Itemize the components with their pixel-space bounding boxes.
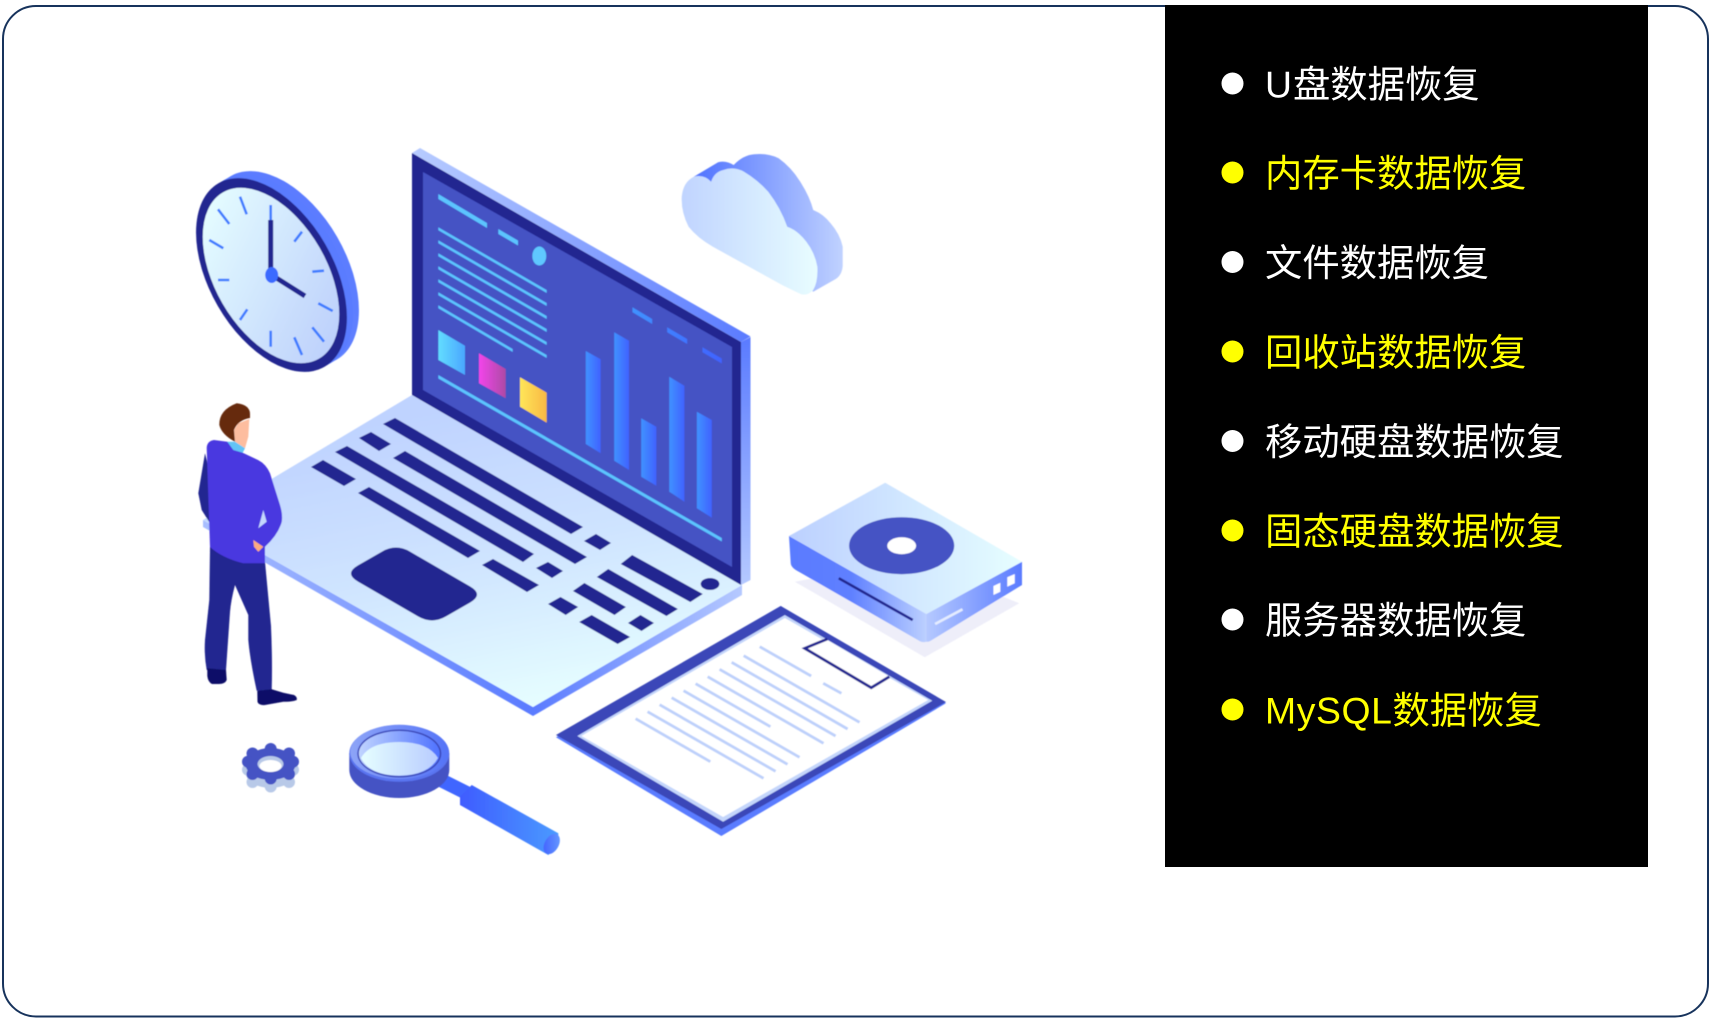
list item: 服务器数据恢复: 服务器数据恢复 (1265, 600, 1526, 642)
icon: clipboard document (556, 606, 946, 836)
screen content (438, 194, 722, 542)
keyboard (311, 418, 719, 644)
list item: 内存卡数据恢复: 内存卡数据恢复 (1265, 152, 1526, 194)
icon: cloud (682, 154, 843, 295)
list item: 移动硬盘数据恢复: 移动硬盘数据恢复 (1265, 421, 1564, 463)
bar chart (586, 307, 722, 518)
icon: magnifying glass (349, 725, 563, 857)
illustration (165, 145, 1022, 857)
icon: wall clock (165, 145, 390, 398)
list item: 回收站数据恢复: 回收站数据恢复 (1265, 332, 1526, 374)
icon: gear (242, 743, 299, 792)
icon: hard disk drive (789, 483, 1022, 657)
list item: 文件数据恢复: 文件数据恢复 (1265, 242, 1489, 284)
laptop (203, 148, 750, 716)
list item: U盘数据恢复: U盘数据恢复 (1265, 64, 1480, 106)
laptop lid (412, 148, 750, 585)
person (198, 403, 297, 705)
list item: 固态硬盘数据恢复: 固态硬盘数据恢复 (1265, 510, 1564, 552)
laptop base (203, 395, 742, 716)
list item: MySQL数据恢复: MySQL数据恢复 (1265, 690, 1542, 732)
panel: data recovery list (1165, 5, 1648, 867)
touchpad (351, 548, 477, 620)
